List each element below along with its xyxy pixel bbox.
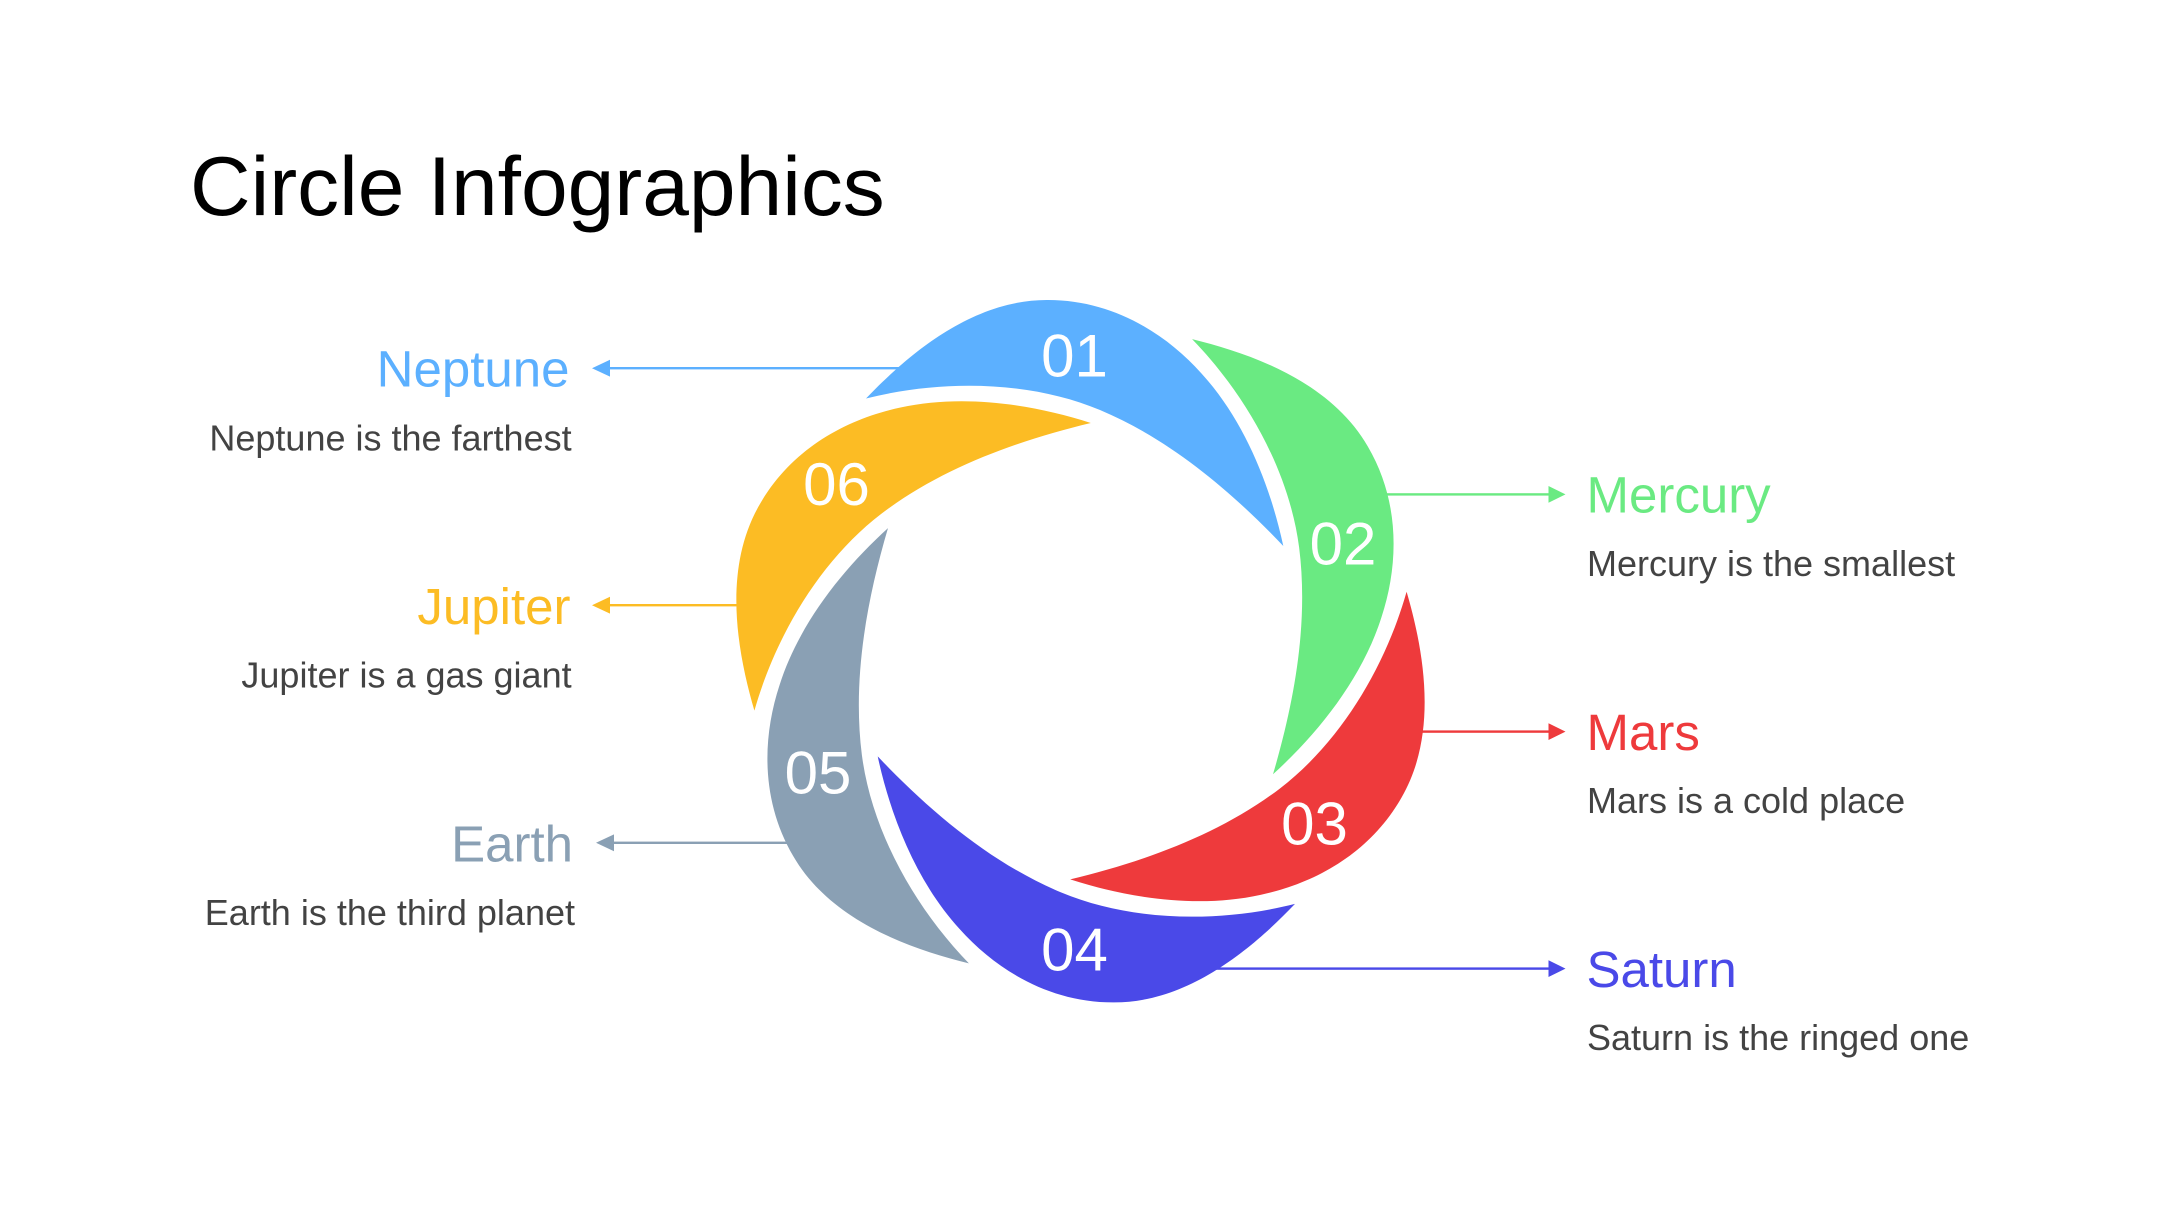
label: Earth	[205, 816, 575, 933]
label: Mars: Mars is a cold place	[1587, 780, 1905, 821]
label: Earth: Earth	[451, 816, 573, 872]
label: Mars	[1586, 704, 1905, 821]
label: Neptune: Neptune	[377, 340, 570, 398]
connector arrow: Earth	[596, 834, 791, 851]
connector arrow: Jupiter	[592, 597, 740, 614]
segment 05: slate	[675, 528, 1097, 1013]
connector arrow: Mercury	[1382, 486, 1566, 503]
label: Mercury: Mercury	[1586, 467, 1771, 524]
label: Jupiter: Jupiter is a gas giant	[241, 654, 572, 696]
label: Neptune: Neptune is the farthest	[209, 418, 572, 458]
label: Jupiter: Jupiter	[417, 578, 571, 635]
circle diagram	[669, 290, 1492, 1013]
segment 03: red	[1070, 518, 1492, 1002]
connector arrow: Saturn	[1212, 960, 1566, 977]
segment 06: yellow	[669, 300, 1091, 784]
title: Circle Infographics	[190, 139, 885, 233]
number 04: 04	[1041, 916, 1108, 983]
number 01: 01	[1041, 322, 1108, 390]
number 06: 06	[803, 451, 870, 518]
label: Saturn	[1586, 941, 1969, 1058]
number 05: 05	[785, 740, 851, 806]
segment 01: blue	[866, 300, 1283, 546]
label: Saturn: Saturn is the ringed one	[1587, 1017, 1969, 1058]
segment 04: indigo	[878, 756, 1295, 1002]
label: Mercury: Mercury is the smallest	[1587, 543, 1955, 584]
label: Saturn: Saturn	[1586, 941, 1737, 998]
label: Mercury	[1586, 467, 1955, 584]
label: Neptune	[209, 340, 572, 458]
segment 02: green	[1064, 290, 1486, 774]
label: Earth: Earth is the third planet	[205, 892, 575, 933]
number 03: 03	[1281, 790, 1348, 857]
label: Mars: Mars	[1586, 704, 1700, 761]
label: Jupiter	[241, 578, 572, 696]
connector arrow: Neptune	[592, 360, 900, 377]
number 02: 02	[1310, 511, 1376, 578]
connector arrow: Mars	[1418, 723, 1566, 740]
